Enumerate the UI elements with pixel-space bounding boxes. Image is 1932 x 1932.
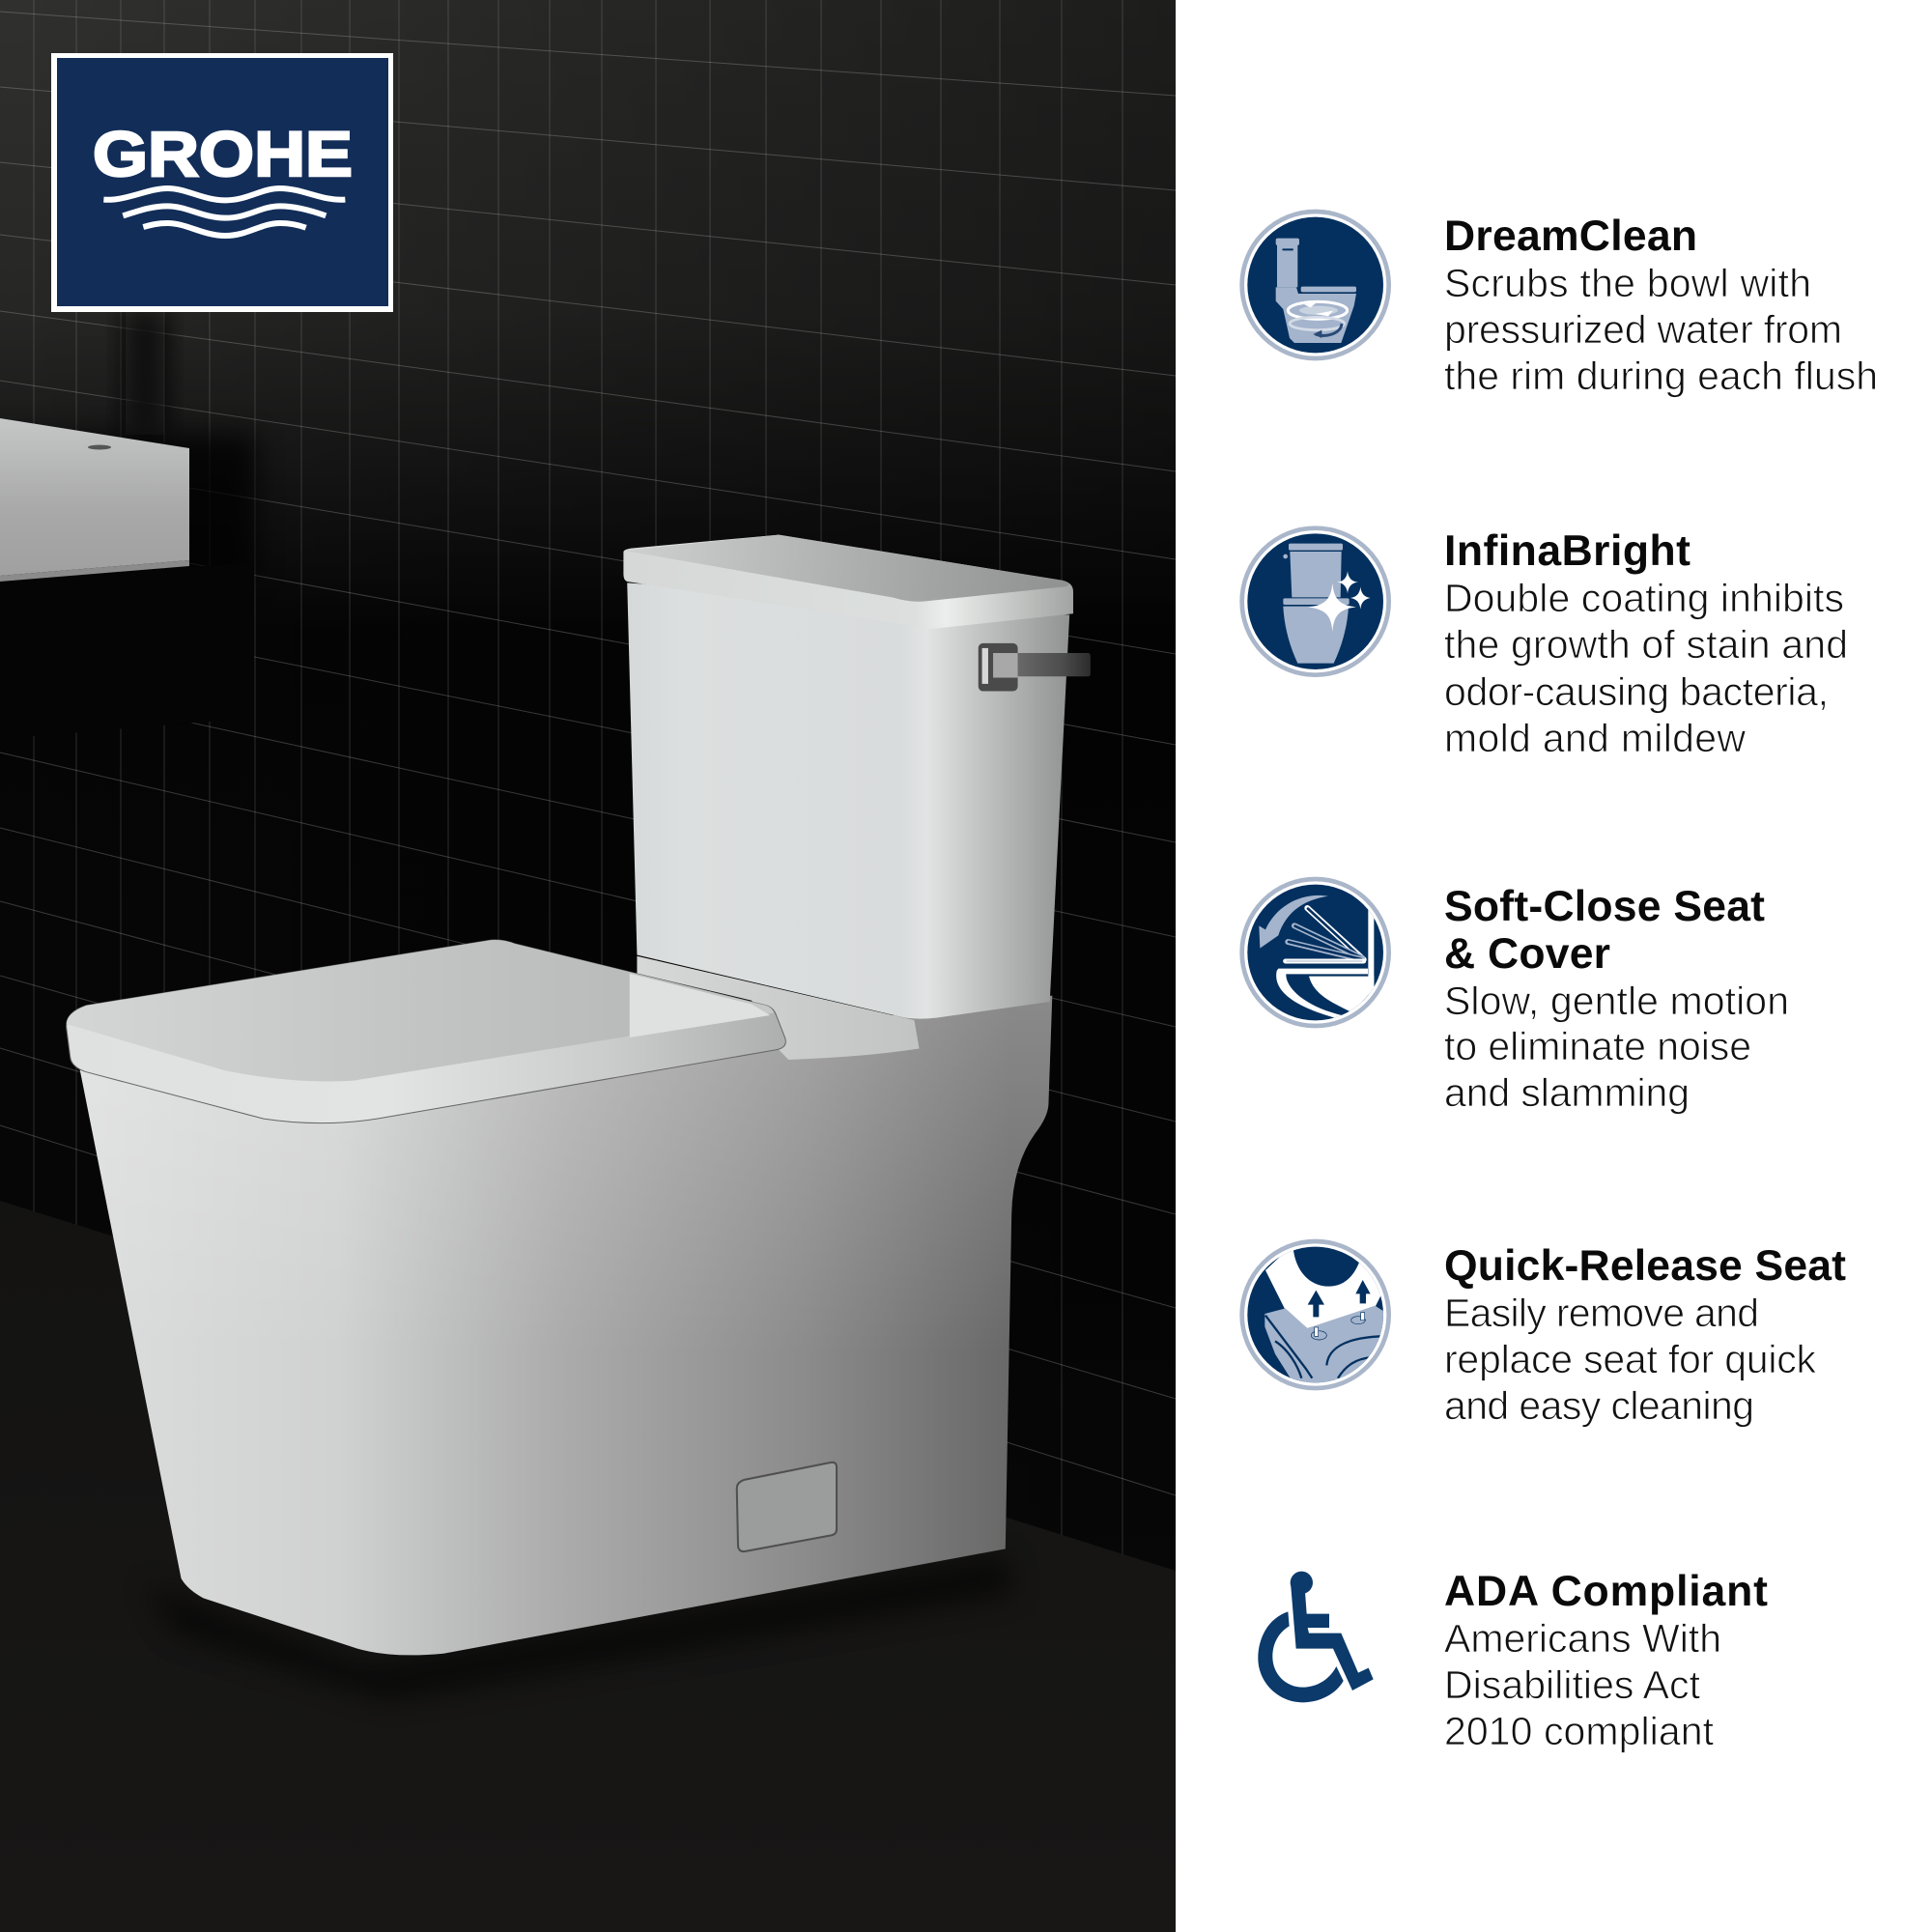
feature: Soft-Close Seat & Cover [1242, 879, 1789, 1115]
description [1444, 1291, 1816, 1428]
icon: sparkling toilet [1242, 528, 1389, 675]
flush lever [979, 643, 1091, 692]
heading: InfinaBright [1444, 527, 1690, 575]
toilet illustration [67, 535, 1091, 1655]
icon: seat lifting off pins [1242, 1241, 1389, 1388]
description: Scrubs the bowl with [1444, 261, 1811, 305]
toilet deck behind the seat [637, 956, 920, 1060]
description [1444, 1616, 1721, 1753]
logo wordmark: GROHE [93, 118, 353, 189]
description: the growth of stain and [1444, 622, 1848, 667]
heading: & Cover [1444, 930, 1610, 978]
description: to eliminate noise [1444, 1024, 1751, 1068]
tank body [627, 582, 1069, 1019]
description [1444, 576, 1848, 760]
description [1444, 979, 1789, 1115]
tank lid [623, 535, 1073, 629]
brand logo [51, 53, 393, 312]
logo waves [103, 188, 345, 236]
description: and easy cleaning [1444, 1383, 1754, 1428]
description: Double coating inhibits [1444, 576, 1844, 620]
description: and slamming [1444, 1070, 1690, 1115]
white feature panel [1176, 0, 1932, 1932]
floor shadow under toilet [145, 1555, 1014, 1700]
feature: InfinaBright [1242, 527, 1848, 760]
description: pressurized water from [1444, 307, 1842, 352]
description: Americans With [1444, 1616, 1721, 1661]
icon: wheelchair symbol [1258, 1572, 1374, 1702]
heading: DreamClean [1444, 213, 1697, 260]
description: the rim during each flush [1444, 354, 1878, 398]
description: Slow, gentle motion [1444, 979, 1789, 1023]
heading [1444, 883, 1765, 978]
description: Disabilities Act [1444, 1662, 1701, 1707]
access cover [737, 1463, 837, 1551]
description: replace seat for quick [1444, 1337, 1816, 1381]
photo panel: bathroom wall and floor [0, 0, 1176, 1932]
icon: closing seat [1242, 879, 1389, 1026]
toilet base bowl [79, 996, 1052, 1655]
heading: ADA Compliant [1444, 1568, 1768, 1615]
description [1444, 261, 1878, 398]
heading: Quick-Release Seat [1444, 1242, 1846, 1290]
feature: DreamClean [1242, 212, 1878, 398]
feature: ADA Compliant [1258, 1568, 1768, 1753]
heading: Soft-Close Seat [1444, 883, 1765, 930]
icon: toilet with swirling water [1242, 212, 1389, 358]
toilet seat lid [67, 940, 785, 1123]
feature: Quick-Release Seat [1242, 1241, 1846, 1428]
description: odor-causing bacteria, [1444, 669, 1829, 714]
vanity counter and sink [0, 418, 256, 739]
description: Easily remove and [1444, 1291, 1759, 1335]
description: 2010 compliant [1444, 1709, 1715, 1753]
description: mold and mildew [1444, 716, 1746, 760]
